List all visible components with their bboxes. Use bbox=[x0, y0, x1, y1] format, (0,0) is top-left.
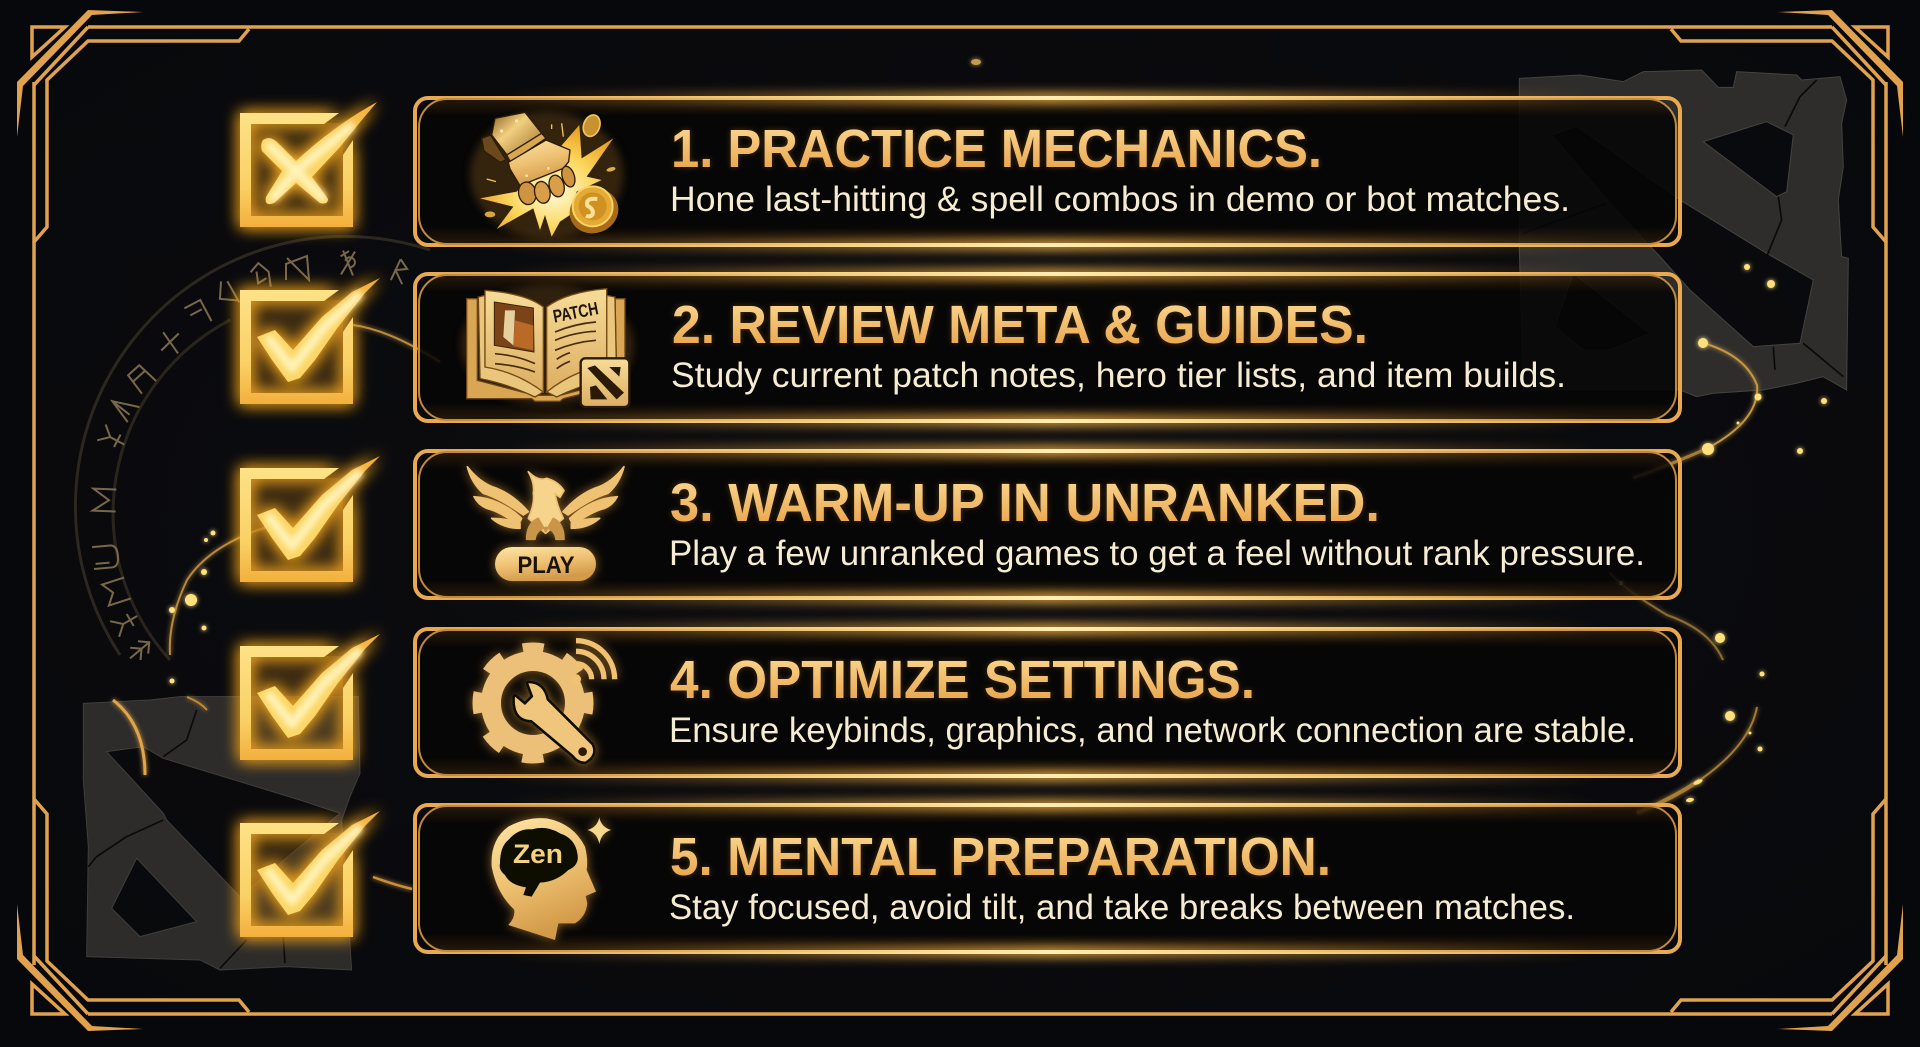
description: Stay focused, avoid tilt, and take breaks between matches. bbox=[669, 888, 1575, 927]
panel frame bbox=[415, 623, 1680, 782]
title: 2. REVIEW META & GUIDES. bbox=[672, 295, 1368, 355]
row 4: optimize settings bbox=[240, 623, 1680, 782]
row 3: warm-up in unranked bbox=[240, 445, 1680, 604]
checkbox with check mark bbox=[240, 456, 380, 582]
play label: PLAY bbox=[518, 552, 574, 579]
title: 5. MENTAL PREPARATION. bbox=[670, 827, 1331, 887]
title: 3. WARM-UP IN UNRANKED. bbox=[670, 473, 1380, 533]
title: 4. OPTIMIZE SETTINGS. bbox=[670, 650, 1255, 710]
panel frame bbox=[415, 92, 1680, 251]
icon: patch notes book with dota badge: PATCH bbox=[551, 298, 600, 327]
description: Hone last-hitting & spell combos in demo or bot matches. bbox=[670, 180, 1570, 219]
panel frame bbox=[415, 445, 1680, 604]
checkbox with check mark bbox=[240, 811, 380, 937]
row 1: practice mechanics bbox=[240, 92, 1680, 251]
dota logo: stone top right bbox=[1519, 70, 1848, 397]
checkbox with check mark bbox=[240, 634, 380, 760]
checkbox with check mark bbox=[240, 278, 380, 404]
description: Ensure keybinds, graphics, and network connection are stable. bbox=[669, 711, 1636, 750]
dota logo: stone bottom left bbox=[83, 697, 360, 970]
description: Play a few unranked games to get a feel without rank pressure. bbox=[669, 534, 1645, 573]
icon: patch notes book with dota badge bbox=[461, 285, 634, 407]
icon: zen head with brain bbox=[492, 817, 611, 940]
title: 1. PRACTICE MECHANICS. bbox=[671, 119, 1322, 179]
zen label: Zen bbox=[513, 839, 563, 869]
panel frame bbox=[415, 799, 1680, 958]
sparks and trails bbox=[113, 59, 1827, 889]
icon: phoenix with play button bbox=[467, 467, 624, 581]
rune circle bbox=[75, 236, 430, 664]
description: Study current patch notes, hero tier lists, and item builds. bbox=[671, 356, 1566, 395]
checkbox with x mark bbox=[240, 102, 377, 227]
panel frame bbox=[415, 268, 1680, 427]
row 2: review meta and guides bbox=[240, 268, 1680, 427]
icon: gauntlet punching coin bbox=[470, 112, 625, 240]
icon: gear, wrench and wifi bbox=[478, 641, 615, 762]
row 5: mental preparation bbox=[240, 799, 1680, 958]
